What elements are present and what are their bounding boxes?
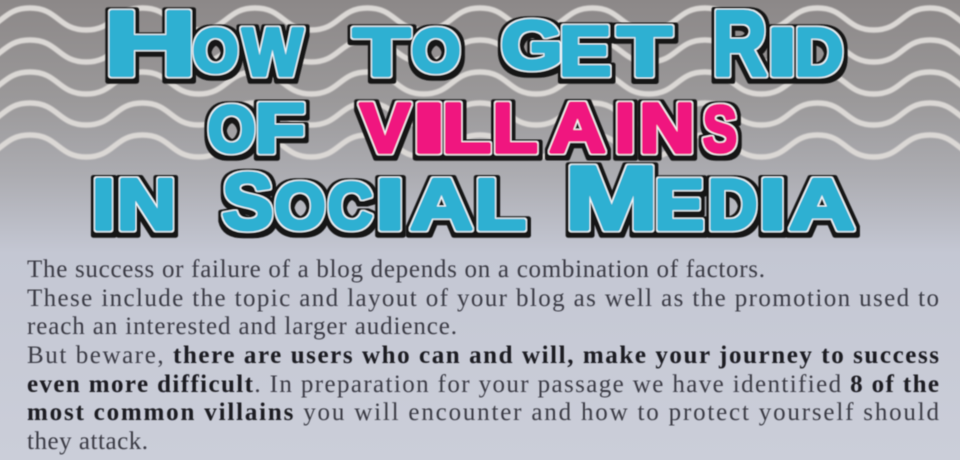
title line 3: M xyxy=(565,149,658,249)
title line 1: D xyxy=(795,15,843,90)
intro line 2: These include the topic and layout of your blog as well as the promotion used to xyxy=(27,285,939,312)
intro line 6: most common villains you will encounter and how to protect yourself should xyxy=(27,399,940,426)
title line 1: T xyxy=(618,12,672,90)
title line 2: villains: S xyxy=(703,92,737,166)
intro line 1: The success or failure of a blog depends on a combination of factors. xyxy=(27,256,765,283)
title line 3: I xyxy=(92,166,115,245)
title line 1: W xyxy=(242,15,303,90)
title line 3: O xyxy=(275,170,325,242)
title line 2: villains: I xyxy=(413,89,445,167)
title line 2: villains: I xyxy=(614,89,636,167)
intro text block xyxy=(27,256,940,455)
title line 3: S xyxy=(222,156,273,246)
title line 2: of: O xyxy=(208,92,255,166)
title line 2: of: F xyxy=(255,89,305,167)
title line 3: A xyxy=(790,166,854,245)
title line 3: D xyxy=(708,166,757,245)
title line 3: E xyxy=(655,166,704,245)
title line 3: L xyxy=(475,166,526,245)
intro line 3: reach an interested and larger audience. xyxy=(27,313,457,340)
title line 3: N xyxy=(117,166,176,245)
title line 1: O xyxy=(412,18,460,84)
title line 2: villains: L xyxy=(492,89,538,167)
title line 3: I xyxy=(759,166,786,245)
title line 3: I xyxy=(376,166,404,245)
title line 2: villains: L xyxy=(442,89,491,167)
title line 2: villains: A xyxy=(550,89,606,167)
title line 1: G xyxy=(501,8,562,84)
intro line 5: even more difficult. In preparation for your passage we have identified 8 of the xyxy=(27,371,939,398)
title line 1: O xyxy=(193,18,238,84)
intro line 7: they attack. xyxy=(27,428,148,455)
title xyxy=(92,0,854,249)
wavy background lines xyxy=(0,8,960,157)
intro line 4: But beware, there are users who can and will, make your journey to success xyxy=(27,342,939,369)
title line 2: villains: V xyxy=(360,89,410,167)
title line 3: C xyxy=(328,170,372,242)
title line 1: I xyxy=(768,15,796,90)
title line 2: villains: N xyxy=(639,89,695,167)
title line 1: E xyxy=(559,12,611,90)
title line 1: T xyxy=(354,15,410,90)
title line 3: A xyxy=(410,166,472,245)
